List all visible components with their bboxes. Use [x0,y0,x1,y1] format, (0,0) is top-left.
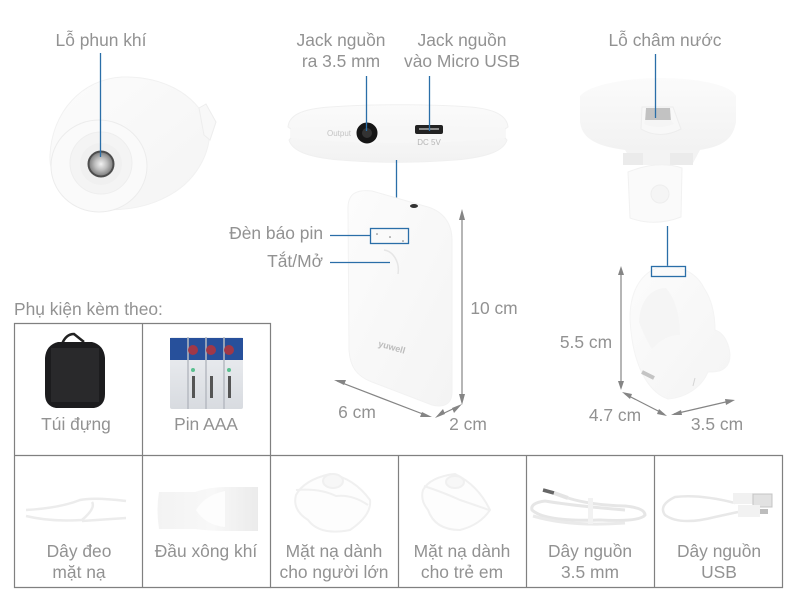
dimension: 2 cm: 2 cm [449,414,487,434]
label: Dây nguồn [677,541,761,561]
leader: spray outlet [100,53,102,157]
leader: power button [330,262,390,264]
arrow: height 10 cm [459,209,465,405]
highlight box: refill position [652,266,686,276]
label: 3.5 mm [561,562,619,582]
label: power button: Tắt/Mở [267,251,323,271]
dimension: 6 cm: 6 cm [338,402,376,422]
icon: coiled cable [532,490,645,524]
label: battery light: Đèn báo pin [229,223,323,243]
icon: adult mask [295,474,370,532]
label: micro USB input jack: vào Micro USB [404,51,520,71]
icon: spray outlet nebulizer view [50,77,216,212]
cell: child mask [414,474,510,582]
icon: strap [26,499,126,521]
icon: device end view with ports: DC 5V [417,138,441,147]
dimension: 10 cm: 10 cm [470,298,518,318]
icon: black bag [45,334,105,408]
icon: battery pack [170,337,243,409]
label: Mặt nạ dành [414,541,510,561]
label [280,541,388,582]
cell: nebulizer head [155,487,258,561]
dimension: 5.5 cm: 5.5 cm [560,332,612,352]
icon: child mask [422,474,490,530]
cell: adult mask [280,474,388,582]
leader: refill hole [654,54,656,118]
leader: refill to cup [666,226,668,267]
label: Túi đựng [41,414,111,434]
label: micro USB input jack [404,30,520,71]
label: USB [701,562,737,582]
arrow: length 4.7 cm [622,392,667,416]
label [414,541,510,582]
icon: cup side view [630,266,730,399]
icon: device body front view: yuwell [377,339,406,356]
label: Mặt nạ dành [286,541,382,561]
arrow: width 3.5 cm [671,399,735,415]
label [548,541,632,582]
label: 3.5 mm output jack: Jack nguồn [297,30,385,50]
heading: accessories: Phụ kiện kèm theo: [14,299,163,319]
leader: USB jack [428,76,430,131]
leader: output jack [366,76,368,131]
cell: 3.5 mm cable [532,490,645,582]
accessories table grid [14,324,782,588]
indicator box: battery lights [370,228,408,244]
label: water refill hole: Lỗ châm nước [609,30,722,50]
cell: carry bag [41,334,111,434]
dimension: 4.7 cm: 4.7 cm [589,405,641,425]
leader: device end to body [396,160,398,202]
arrow: width 6 cm [334,380,432,417]
icon: device end view with ports: Output [327,129,352,138]
label: micro USB input jack: Jack nguồn [418,30,506,50]
cell: AAA batteries [170,337,243,434]
dimension: 3.5 cm: 3.5 cm [691,414,743,434]
label: Pin AAA [174,414,238,434]
label: spray outlet: Lỗ phun khí [56,30,147,50]
cell: USB cable [663,493,772,582]
label: Dây đeo [47,541,111,561]
label: cho người lớn [280,562,388,582]
icon: device body front view [348,191,452,406]
label [677,541,761,582]
icon: USB cable [663,493,772,521]
label: 3.5 mm output jack: ra 3.5 mm [302,51,380,71]
leader: battery light [330,234,370,236]
cell: mask strap [26,499,126,582]
icon: device end view with ports [288,105,508,162]
label: Dây nguồn [548,541,632,561]
label: mặt nạ [52,562,106,582]
label: cho trẻ em [421,562,503,582]
label: 3.5 mm output jack [297,30,385,71]
arrow: height 5.5 cm [618,266,624,390]
icon: nozzle [158,487,258,531]
label [47,541,111,582]
arrow: depth 2 cm [435,404,462,418]
icon: water refill cup view [580,78,736,222]
label: Đầu xông khí [155,541,257,561]
